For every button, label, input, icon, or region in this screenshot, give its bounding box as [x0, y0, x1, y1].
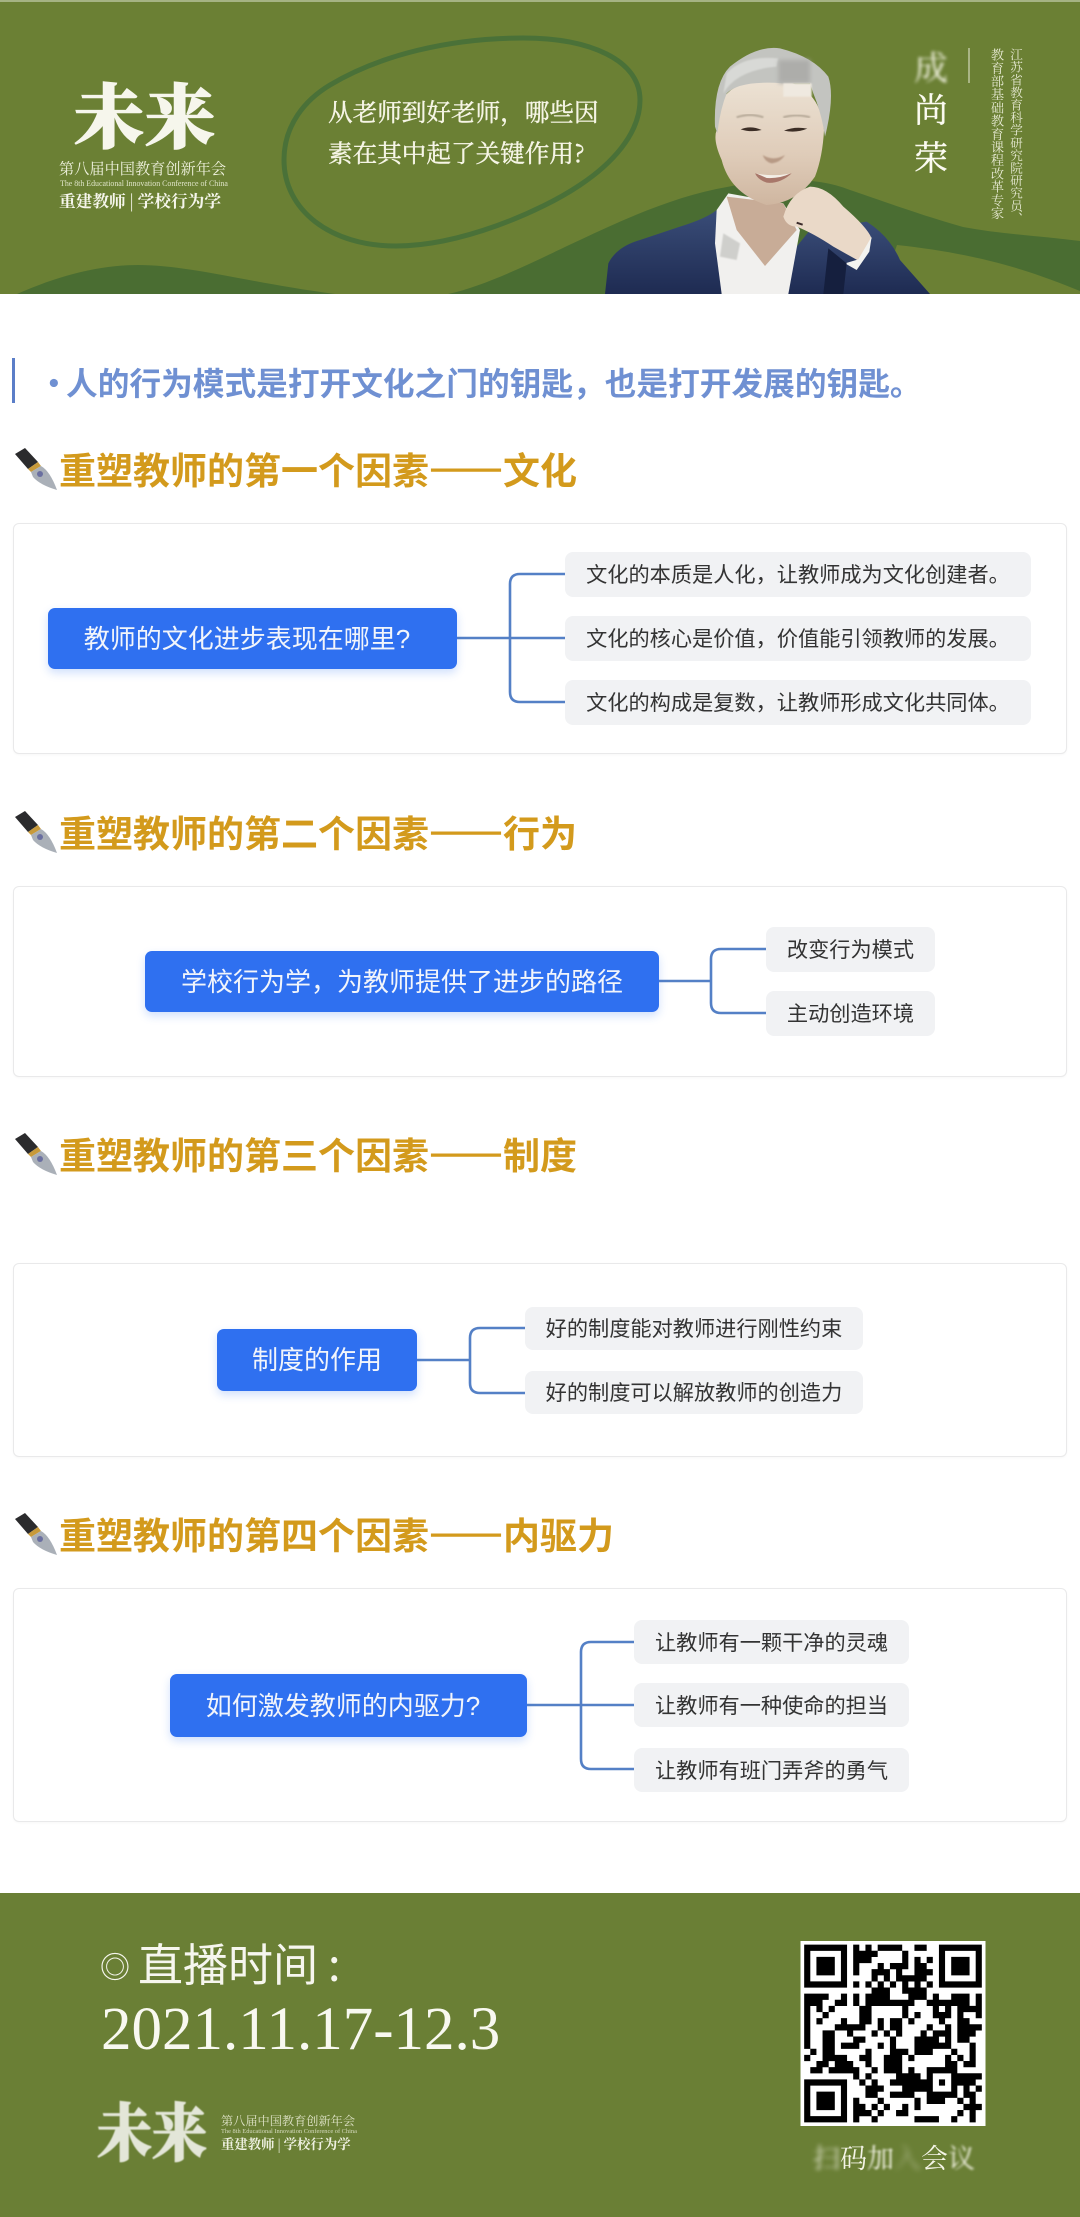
icon: fountain pen — [15, 448, 57, 490]
heading: factor 4 inner drive — [15, 1506, 614, 1560]
branch node 2: 让教师有一种使命的担当 — [655, 1694, 888, 1718]
heading text: 重塑教师的第二个因素——行为 — [59, 804, 577, 858]
header banner — [0, 0, 1080, 294]
central node — [48, 608, 457, 669]
branch node 3: 文化的构成是复数，让教师形成文化共同体。 — [586, 692, 1010, 715]
branch node 2 — [525, 1371, 863, 1414]
QR code — [800, 1941, 986, 2126]
connector lines — [417, 1326, 525, 1394]
icon: fountain pen — [15, 1513, 57, 1555]
name char 1: 成 — [914, 41, 948, 90]
logo theme line: 重建教师 | 学校行为学 — [221, 2134, 351, 2153]
logo: 未来 — [59, 62, 228, 212]
logo english name: The 8th Educational Innovation Conference of China — [221, 2128, 357, 2135]
QR caption: 会 — [921, 2137, 948, 2176]
logo theme line: 重建教师 | 学校行为学 — [59, 188, 221, 212]
logo brush title: 未来 — [74, 62, 216, 163]
central node — [217, 1329, 417, 1391]
heading: factor 3 system — [15, 1126, 577, 1180]
branch node 3 — [634, 1748, 909, 1792]
branch node 2 — [766, 991, 935, 1036]
subtitle: 人的行为模式是打开文化之门的钥匙，也是打开发展的钥匙。 — [66, 359, 922, 405]
central node: 教师的文化进步表现在哪里? — [84, 624, 410, 654]
branch node 2: 好的制度可以解放教师的创造力 — [546, 1382, 842, 1405]
branch node 1 — [565, 552, 1031, 597]
name separator — [968, 48, 970, 83]
speaker title column 2: 教育部基础教育课程改革专家 — [988, 48, 1007, 220]
central node: 学校行为学，为教师提供了进步的路径 — [181, 966, 623, 996]
branch node 1: 改变行为模式 — [787, 939, 914, 962]
live time label: 直播时间: — [138, 1929, 341, 1994]
branch node 1: 让教师有一颗干净的灵魂 — [655, 1632, 888, 1654]
central node: 制度的作用 — [252, 1345, 382, 1375]
QR caption: 入 — [894, 2137, 921, 2176]
live time label: ◎ — [100, 1943, 130, 1987]
speaker title column 1: 江苏省教育科学研究院研究员、 — [1007, 48, 1026, 224]
branch node 3: 让教师有班门弄斧的勇气 — [655, 1760, 888, 1782]
icon: fountain pen — [15, 1133, 57, 1175]
QR caption: 码 — [840, 2137, 867, 2176]
connector lines — [659, 948, 766, 1014]
heading text: 重塑教师的第四个因素——内驱力 — [59, 1506, 614, 1560]
panel: inner drive mind map — [13, 1588, 1067, 1822]
branch node 1 — [766, 927, 935, 972]
header background waves and blob — [0, 0, 1080, 294]
QR caption — [812, 2137, 975, 2176]
heading: factor 1 culture — [15, 441, 577, 495]
heading text: 重塑教师的第一个因素——文化 — [59, 441, 577, 495]
speaker name — [914, 41, 948, 180]
QR caption: 议 — [948, 2137, 975, 2176]
connector lines — [457, 572, 565, 704]
logo brush title: 未来 — [97, 2083, 207, 2174]
heading: factor 2 behaviour — [15, 804, 577, 858]
logo english name: The 8th Educational Innovation Conference of China — [60, 179, 228, 188]
branch node 3 — [565, 680, 1031, 725]
branch node 1 — [634, 1620, 909, 1664]
logo conference name: 第八届中国教育创新年会 — [59, 158, 226, 179]
subtitle accent bar — [12, 358, 14, 403]
branch node 2: 文化的核心是价值，价值能引领教师的发展。 — [586, 628, 1010, 651]
subtitle: · — [38, 359, 70, 405]
logo conference name: 第八届中国教育创新年会 — [221, 2112, 355, 2129]
question text — [328, 94, 599, 170]
question text: 从老师到好老师，哪些因 — [328, 94, 599, 129]
branch node 1: 好的制度能对教师进行刚性约束 — [546, 1318, 842, 1341]
live date: 2021.11.17-12.3 — [101, 1996, 500, 2063]
branch node 2 — [634, 1683, 909, 1727]
footer logo — [97, 2083, 357, 2174]
branch node 1 — [525, 1307, 863, 1350]
central node: 如何激发教师的内驱力? — [206, 1690, 480, 1720]
QR caption: 扫 — [813, 2137, 840, 2176]
connector lines — [527, 1640, 634, 1770]
central node — [145, 951, 659, 1012]
question text: 素在其中起了关键作用? — [328, 135, 585, 170]
branch node 2: 主动创造环境 — [787, 1003, 914, 1026]
name char 3: 荣 — [914, 131, 948, 180]
panel: behaviour mind map — [13, 886, 1067, 1077]
name char 2: 尚 — [914, 83, 948, 132]
heading text: 重塑教师的第三个因素——制度 — [59, 1126, 577, 1180]
QR caption: 加 — [867, 2137, 894, 2176]
central node — [170, 1674, 527, 1737]
footer band — [0, 1893, 1080, 2217]
icon: fountain pen — [15, 811, 57, 853]
speaker portrait — [605, 48, 930, 294]
panel: culture mind map — [13, 523, 1067, 754]
branch node 1: 文化的本质是人化，让教师成为文化创建者。 — [586, 564, 1010, 587]
panel: system mind map — [13, 1263, 1067, 1457]
branch node 2 — [565, 616, 1031, 661]
